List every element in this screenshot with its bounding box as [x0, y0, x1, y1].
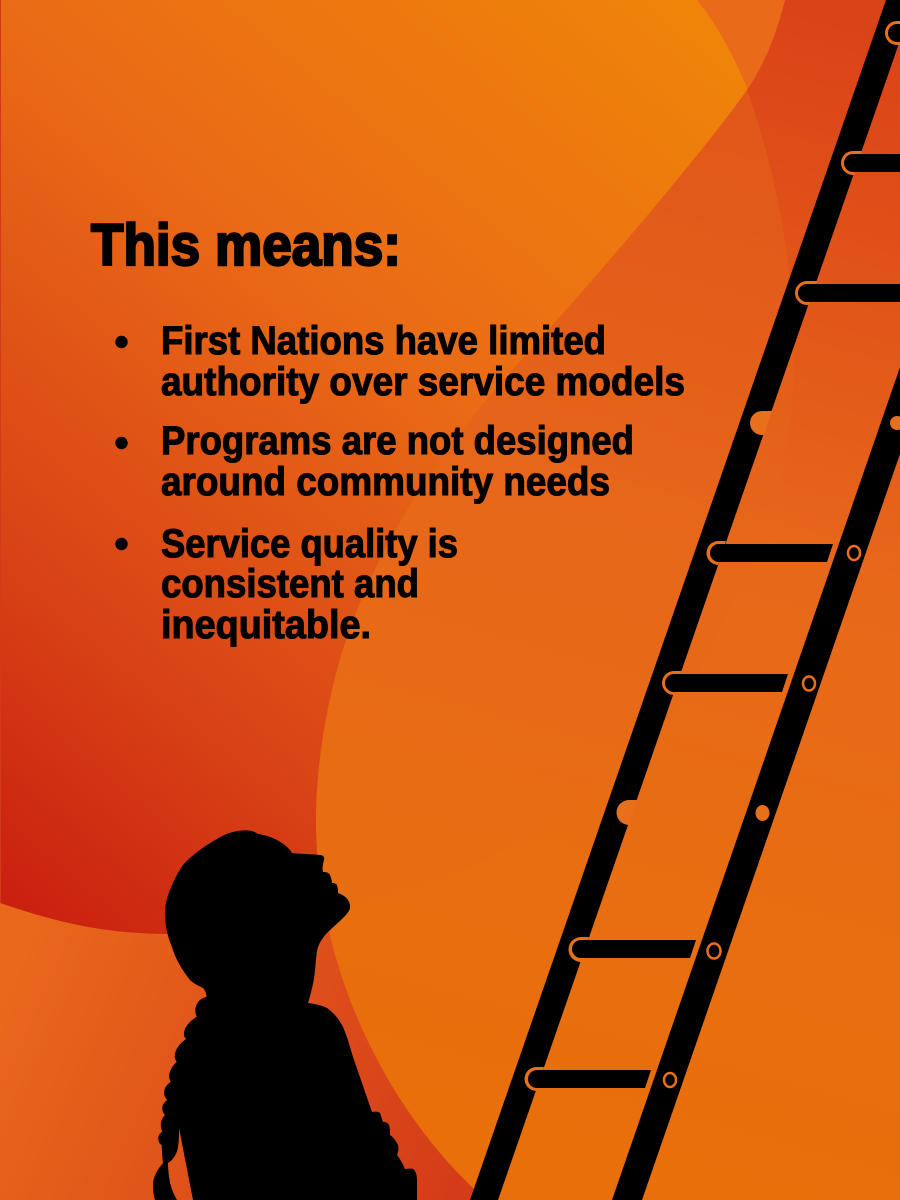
silhouette of a person with a braid looking up: [153, 830, 417, 1200]
bullet item 2: [115, 419, 634, 504]
rung 6: [662, 671, 815, 695]
bullet item 2: around community needs: [161, 460, 610, 504]
bullet item 1: authority over service models: [161, 360, 685, 404]
rung 1: [885, 21, 900, 45]
ladder: [470, 0, 900, 1200]
bullet item 1: [115, 319, 685, 404]
rail peg 7: [756, 805, 770, 821]
background blob: red to orange gradient: [0, 0, 795, 934]
broken rung 7: [616, 800, 637, 825]
background layer: right side curved shape: [316, 0, 900, 1200]
bullet item 1: First Nations have limited: [161, 319, 606, 363]
title: This means:: [91, 213, 401, 278]
broken rung 4: [750, 411, 772, 435]
bullet list: [115, 319, 685, 647]
rung 3: [795, 281, 900, 305]
rail peg 4: [890, 416, 900, 430]
bullet item 3: [115, 522, 458, 647]
rung 5: [706, 541, 860, 565]
bullet item 2: Programs are not designed: [161, 419, 634, 463]
rung 8: [568, 937, 720, 962]
bullet item 3: inequitable.: [161, 603, 371, 647]
background overlay: subtle curved shape: [316, 90, 794, 908]
bullet item 3: consistent and: [161, 562, 419, 606]
ladder right rail: [612, 0, 900, 1200]
rung 9: [524, 1067, 676, 1091]
bullet item 3: Service quality is: [161, 522, 458, 566]
ladder left rail: [470, 0, 900, 1200]
rung 2: [841, 151, 900, 175]
